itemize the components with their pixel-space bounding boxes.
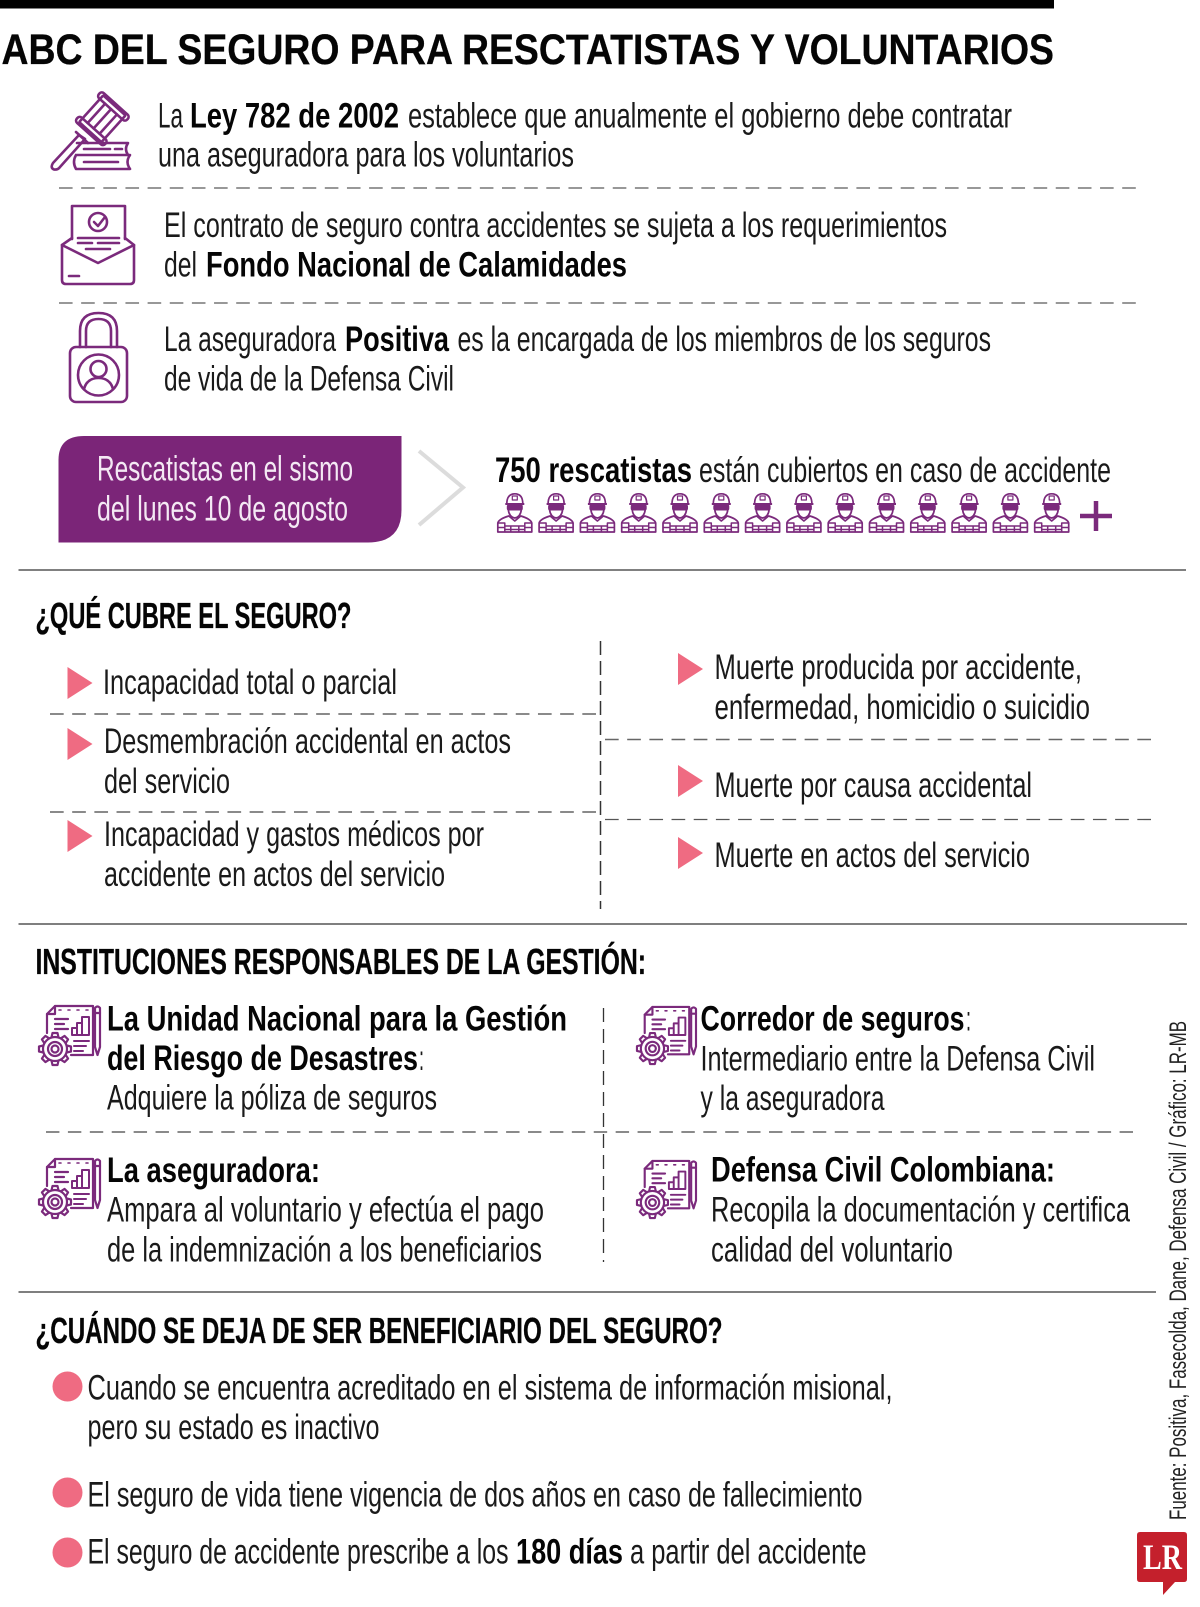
- purple callout: Rescatistas en el sismo: [97, 450, 353, 488]
- card: unidad nacional: :: [419, 1039, 424, 1078]
- card: corredor: [637, 1000, 1095, 1118]
- icon: padlock with user: [70, 313, 127, 402]
- item: causa accidental: [678, 765, 1032, 805]
- panel: cuando se deja de ser beneficiario: [36, 1310, 893, 1572]
- logo: LR: LR: [1143, 1537, 1183, 1577]
- card: aseguradora: de la indemnización a los beneficiarios: [107, 1230, 542, 1270]
- top bar: [0, 0, 1054, 8]
- panel: que cubre el seguro: [36, 595, 1151, 909]
- heading: ¿CUÁNDO SE DEJA DE SER BENEFICIARIO DEL SEGURO?: [36, 1310, 722, 1351]
- logo: LR: [1137, 1532, 1187, 1595]
- text: ley 782: [158, 96, 1012, 174]
- text: positiva: de vida de la Defensa Civil: [164, 360, 454, 398]
- item: desmembracion: [68, 722, 511, 801]
- item: gastos medicos: accidente en actos del servicio: [104, 855, 445, 894]
- card: defensa civil: calidad del voluntario: [711, 1230, 953, 1270]
- card: unidad nacional: del Riesgo de Desastres: [107, 1039, 418, 1078]
- panel: rescatistas: [58, 436, 1112, 542]
- item: desmembracion: Desmembración accidental en actos: [104, 722, 511, 761]
- text: positiva: [164, 320, 991, 398]
- card: unidad nacional: La Unidad Nacional para la Gestión: [107, 1000, 567, 1038]
- text: fondo nacional: del: [164, 246, 197, 284]
- card: corredor: Corredor de seguros: [700, 1000, 964, 1038]
- card: defensa civil: Defensa Civil Colombiana:: [711, 1150, 1055, 1190]
- card: unidad nacional: Adquiere la póliza de seguros: [107, 1078, 437, 1118]
- card: aseguradora: [39, 1151, 544, 1270]
- card: defensa civil: [637, 1150, 1130, 1270]
- item: inactivo: [52, 1368, 893, 1447]
- panel: instituciones: [36, 940, 1133, 1270]
- item: gastos medicos: [68, 815, 484, 894]
- item: inactivo: pero su estado es inactivo: [88, 1408, 380, 1447]
- item: gastos medicos: Incapacidad y gastos médicos por: [104, 815, 484, 854]
- icon: gavel and books: [52, 91, 130, 170]
- card: aseguradora: La aseguradora:: [107, 1151, 320, 1190]
- icon row: rescuers: [498, 494, 1069, 532]
- source credit: Fuente: Positiva, Fasecolda, Dane, Defensa Civil / Gráfico: LR-MB: [1165, 1021, 1192, 1520]
- purple callout: del lunes 10 de agosto: [97, 490, 348, 528]
- item: incapacidad: Incapacidad total o parcial: [103, 663, 397, 702]
- item: prescribe: 180 días: [516, 1532, 623, 1572]
- item: vigencia: El seguro de vida tiene vigencia de dos años en caso de fallecimiento: [88, 1476, 862, 1514]
- item: vigencia: [52, 1476, 862, 1514]
- text: 750 rescatistas: [495, 451, 1111, 490]
- text: ley 782: Ley 782 de 2002: [190, 96, 399, 136]
- item: muerte producida: [678, 648, 1090, 727]
- text: positiva: es la encargada de los miembros de los seguros: [458, 320, 991, 359]
- text: fondo nacional: Fondo Nacional de Calamidades: [206, 246, 627, 284]
- item: actos del servicio: [678, 836, 1030, 875]
- item: inactivo: Cuando se encuentra acreditado en el sistema de información misional,: [88, 1368, 893, 1408]
- item: actos del servicio: Muerte en actos del servicio: [714, 836, 1030, 875]
- panel: law facts: [52, 91, 1136, 402]
- text: fondo nacional: [164, 206, 947, 284]
- title: ABC DEL SEGURO PARA RESCTATISTAS Y VOLUNTARIOS: [2, 26, 1054, 74]
- purple callout: [58, 436, 402, 542]
- item: prescribe: El seguro de accidente prescribe a los: [88, 1532, 508, 1572]
- icon: envelope with contract: [62, 206, 134, 284]
- text: positiva: Positiva: [345, 320, 449, 359]
- heading: ¿QUÉ CUBRE EL SEGURO?: [36, 595, 352, 636]
- text: positiva: La aseguradora: [164, 320, 336, 359]
- text: 750 rescatistas: 750 rescatistas: [495, 451, 692, 490]
- card: aseguradora: Ampara al voluntario y efectúa el pago: [107, 1190, 544, 1230]
- arrow: chevron: [419, 451, 463, 525]
- item: causa accidental: Muerte por causa accidental: [714, 766, 1032, 805]
- item: desmembracion: del servicio: [104, 762, 230, 801]
- card: corredor: :: [966, 1000, 971, 1038]
- item: incapacidad: [68, 663, 397, 702]
- text: ley 782: una aseguradora para los voluntarios: [158, 136, 574, 174]
- text: ley 782: La: [158, 96, 183, 136]
- heading: INSTITUCIONES RESPONSABLES DE LA GESTIÓN:: [36, 940, 646, 982]
- card: corredor: y la aseguradora: [700, 1079, 885, 1118]
- icon: plus: [1080, 501, 1112, 531]
- card: unidad nacional: [39, 1000, 567, 1118]
- item: prescribe: a partir del accidente: [630, 1532, 866, 1572]
